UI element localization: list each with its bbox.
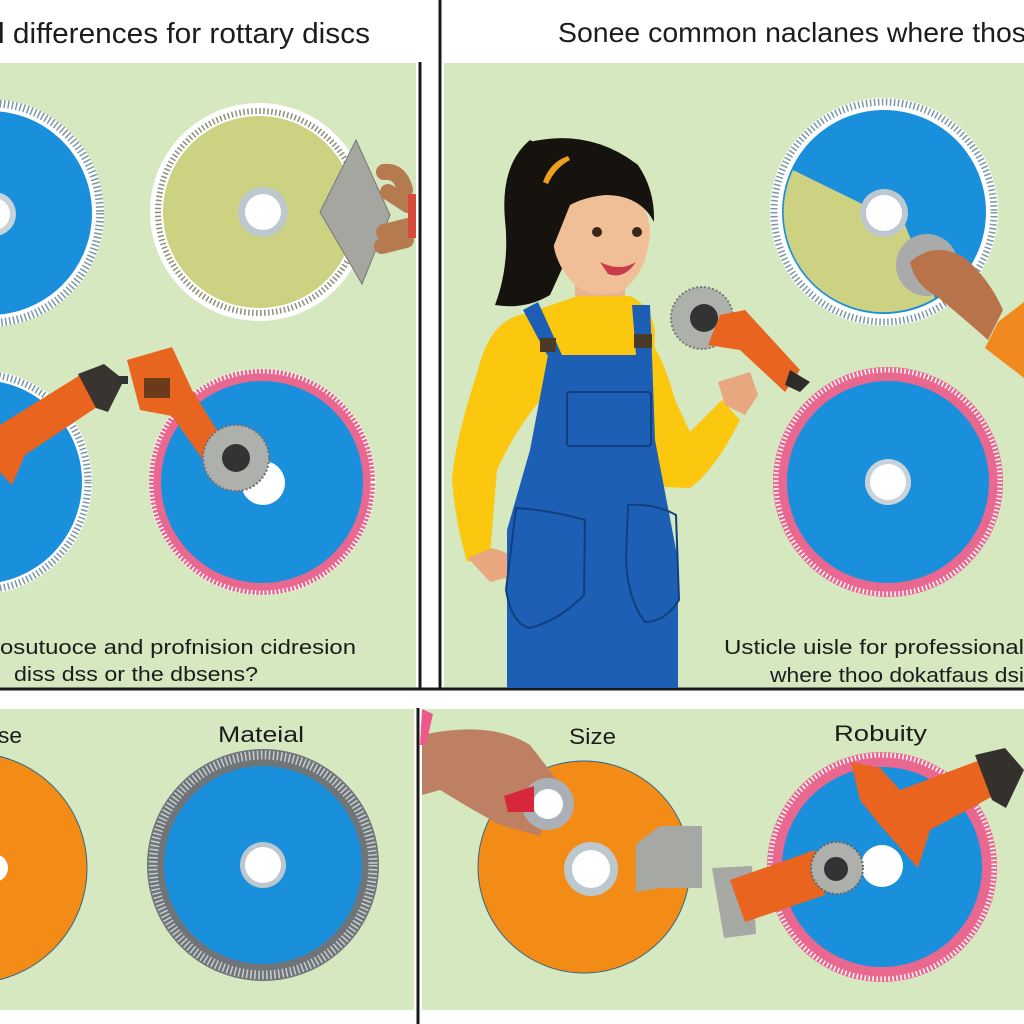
text: left caption: diss dss or the dbsens? (14, 664, 258, 686)
label: size: Size (569, 724, 616, 749)
disc: orange size (478, 761, 690, 973)
heading: right: Sonee common naclanes where thos (558, 17, 1024, 48)
text: right caption (724, 637, 1024, 687)
panel: bottom right (422, 709, 1024, 1010)
panel: bottom left (0, 709, 414, 1010)
disc: pink rim right (773, 367, 1003, 597)
disc: blue lower left (0, 370, 92, 594)
disc: orange left (0, 753, 87, 983)
panel: top right (444, 63, 1024, 688)
disc: grey rim (147, 749, 379, 981)
disc: sandpaper top (150, 103, 368, 321)
disc: blue top left (0, 99, 104, 327)
label: robustness: Robuity (834, 721, 927, 746)
icon: angle grinder left (0, 364, 128, 485)
disc: half sandpaper top right (770, 98, 998, 326)
panel: top left (0, 63, 416, 688)
icon: hand holding small disc (420, 709, 574, 836)
heading: left: l differences for rottary discs (0, 18, 370, 50)
icon: angle grinder center (127, 347, 269, 491)
person: woman in overalls (452, 138, 758, 688)
label: material: Mateial (218, 722, 304, 747)
text: left caption: rosutuoce and profnision cidresion (0, 637, 356, 659)
icon: notch insert (636, 826, 702, 892)
text: right caption: where thoo dokatfaus dsi (769, 665, 1024, 687)
disc: pink rim robustness (767, 752, 997, 982)
icon: grinder upper right (851, 748, 1024, 868)
icon: abrasive sheet and hand (320, 140, 416, 284)
icon: hand with sanding pad (896, 234, 1024, 378)
text: right caption: Usticle uisle for professional (724, 637, 1024, 659)
icon: grinder in hand (671, 287, 810, 392)
icon: grinder lower (712, 842, 863, 938)
disc: pink rim lower (149, 369, 375, 595)
text: left caption (0, 637, 356, 686)
